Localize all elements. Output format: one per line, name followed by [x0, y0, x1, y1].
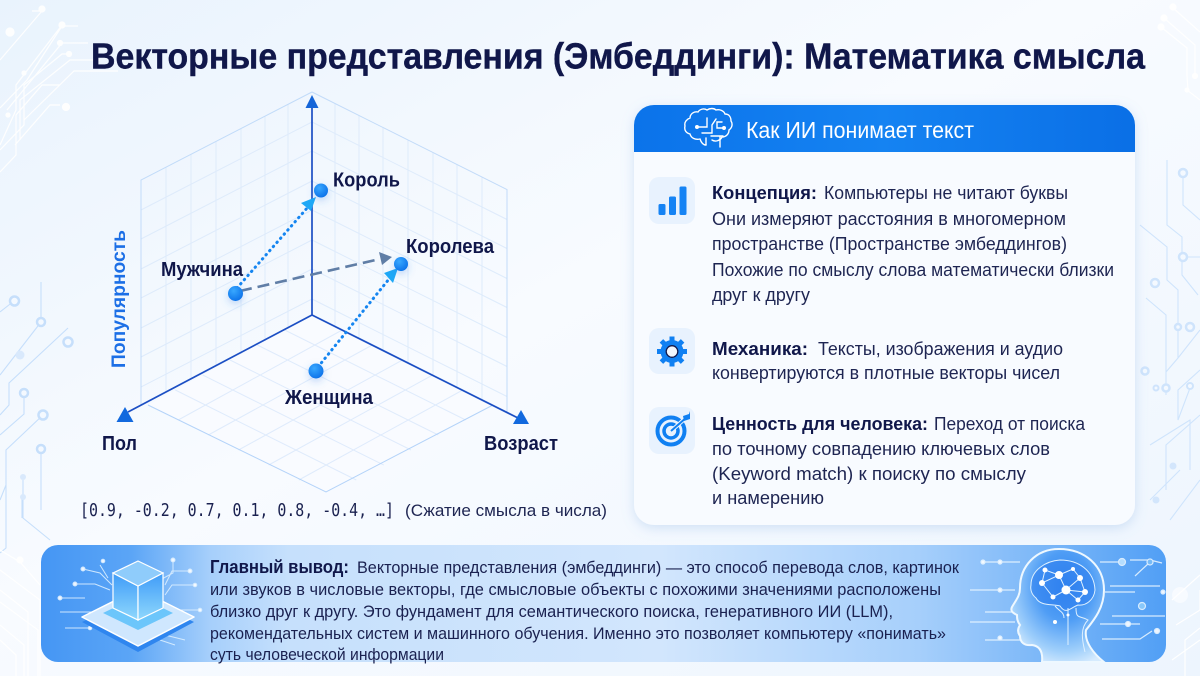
axis: Популярность [306, 95, 318, 315]
vector caption text: (Сжатие смысла в числа) [405, 501, 607, 520]
concept text: пространстве (Пространстве эмбеддингов) [712, 234, 1067, 254]
illustration: glass cube on plate [58, 558, 202, 652]
mechanics item [649, 328, 1063, 383]
circuit decoration: bottom left [0, 550, 40, 676]
label: Возраст: Возраст [484, 432, 558, 455]
mechanics text: конвертируются в плотные векторы чисел [712, 363, 1060, 383]
arrow: Женщина to Королева [318, 268, 398, 367]
3D embedding chart [102, 92, 558, 492]
arrow: Мужчина to Королева [240, 252, 392, 291]
concept text: Похожие по смыслу слова математически близки [712, 260, 1114, 280]
label: Популярность: Популярность [108, 230, 130, 368]
vector caption [80, 501, 607, 521]
axis: Возраст [312, 315, 529, 424]
cube faces [113, 573, 138, 620]
human value item [649, 407, 1086, 508]
floor plane glow [148, 315, 493, 492]
label: Пол: Пол [102, 432, 137, 455]
panel: как ИИ понимает текст [634, 105, 1135, 525]
circuit decoration: left side [0, 282, 72, 553]
brain network [1031, 560, 1095, 652]
banner text: суть человеческой информации [210, 645, 444, 664]
concept text: Концепция: [712, 183, 817, 203]
human value text: (Keyword match) к поиску по смыслу [712, 464, 1026, 484]
panel card [634, 105, 1135, 525]
concept text: друг к другу [712, 285, 810, 305]
banner text [210, 557, 960, 664]
label: Король: Король [333, 168, 400, 192]
arrow: Мужчина to Король [237, 197, 316, 288]
cube circuit traces [58, 558, 202, 645]
human value text: и намерению [712, 488, 824, 508]
concept text: Они измеряют расстояния в многомерном [712, 209, 1066, 229]
human value text: по точному совпадению ключевых слов [712, 439, 1050, 459]
circuit decoration: top right [1158, 4, 1200, 100]
circuit decoration: top left [0, 6, 118, 172]
wall grid: right [312, 92, 507, 413]
axis: Пол [116, 315, 312, 422]
point: Женщина [308, 364, 324, 378]
vector numbers: [0.9, -0.2, 0.7, 0.1, 0.8, -0.4, …] [80, 501, 394, 521]
banner: главный вывод [41, 545, 1166, 664]
panel header [634, 105, 1135, 152]
point: Мужчина [228, 286, 243, 301]
banner text: близко друг к другу. Это фундамент для семантического поиска, генеративного ИИ (LLM), [210, 602, 893, 621]
label: Женщина: Женщина [284, 386, 374, 409]
circuit decoration: right side [1140, 160, 1200, 520]
mechanics text: Механика: [712, 339, 808, 359]
concept text: Компьютеры не читают буквы [824, 183, 1068, 203]
mechanics text: Тексты, изображения и аудио [818, 339, 1063, 359]
panel heading: Как ИИ понимает текст [746, 117, 974, 143]
illustration: AI head with brain [970, 549, 1165, 662]
circuit decoration: bottom right [1172, 575, 1200, 676]
banner text: Главный вывод: [210, 557, 349, 577]
plate [82, 594, 194, 652]
banner text: рекомендательных систем и машинного обучения. Именно это позволяет компьютеру «понимать» [210, 624, 946, 643]
point: Король [314, 184, 328, 198]
title: Векторные представления (Эмбеддинги): Математика смысла [91, 36, 1146, 76]
wall grid: left [141, 92, 312, 405]
data traces [970, 558, 1165, 640]
banner background [41, 545, 1166, 662]
banner text: или звуков в числовые векторы, где смысловые объекты с похожими значениями расположены [210, 580, 941, 599]
head silhouette [1011, 549, 1104, 662]
human value text [712, 414, 1086, 508]
floor grid [148, 330, 493, 492]
banner text: Векторные представления (эмбеддинги) — это способ перевода слов, картинок [357, 558, 960, 577]
icon: brain [685, 108, 732, 147]
mechanics text [712, 339, 1063, 383]
concept item [649, 177, 1114, 305]
point: Королева [394, 257, 408, 271]
human value text: Переход от поиска [934, 414, 1086, 434]
icon: bar chart [649, 177, 695, 224]
human value text: Ценность для человека: [712, 414, 928, 434]
concept text [712, 183, 1114, 305]
label: Мужчина: Мужчина [161, 258, 244, 281]
icon: target [649, 407, 695, 454]
label: Королева: Королева [406, 235, 495, 258]
icon: gear [649, 328, 695, 374]
